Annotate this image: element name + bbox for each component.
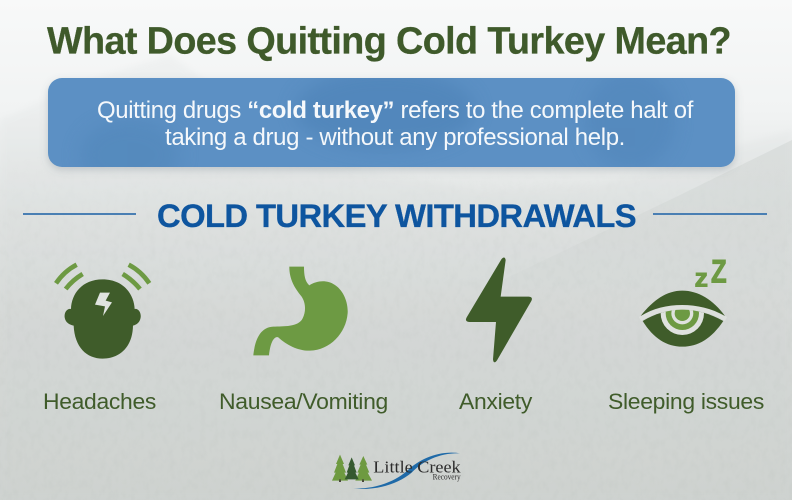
icon: sleepy eye — [640, 253, 727, 347]
callout text: line one: Quitting drugs “cold turkey” refers to the complete halt of — [97, 97, 694, 124]
logo tagline: Recovery — [433, 472, 461, 481]
title: What Does Quitting Cold Turkey Mean? — [47, 20, 731, 62]
label: headaches: Headaches — [43, 389, 156, 414]
logo swoosh — [353, 453, 461, 489]
section heading: COLD TURKEY WITHDRAWALS — [157, 198, 636, 234]
label: sleeping issues: Sleeping issues — [608, 389, 764, 414]
label: anxiety: Anxiety — [459, 389, 533, 414]
icon: zZ sleep letters: z — [695, 265, 708, 293]
label: nausea/vomiting: Nausea/Vomiting — [219, 389, 388, 414]
panel: definition callout — [45, 78, 738, 173]
logo: Little Creek Recovery — [332, 453, 461, 489]
icon: lightning bolt — [466, 257, 532, 362]
logo name: Little Creek — [373, 458, 461, 477]
icon: zZ sleep letters: Z — [711, 253, 727, 289]
icon: head with headache — [56, 265, 149, 359]
callout text: line two: taking a drug - without any professional help. — [165, 124, 625, 151]
logo trees — [332, 455, 372, 482]
icon: zZ sleep letters — [695, 253, 727, 293]
icon: stomach — [253, 267, 348, 355]
